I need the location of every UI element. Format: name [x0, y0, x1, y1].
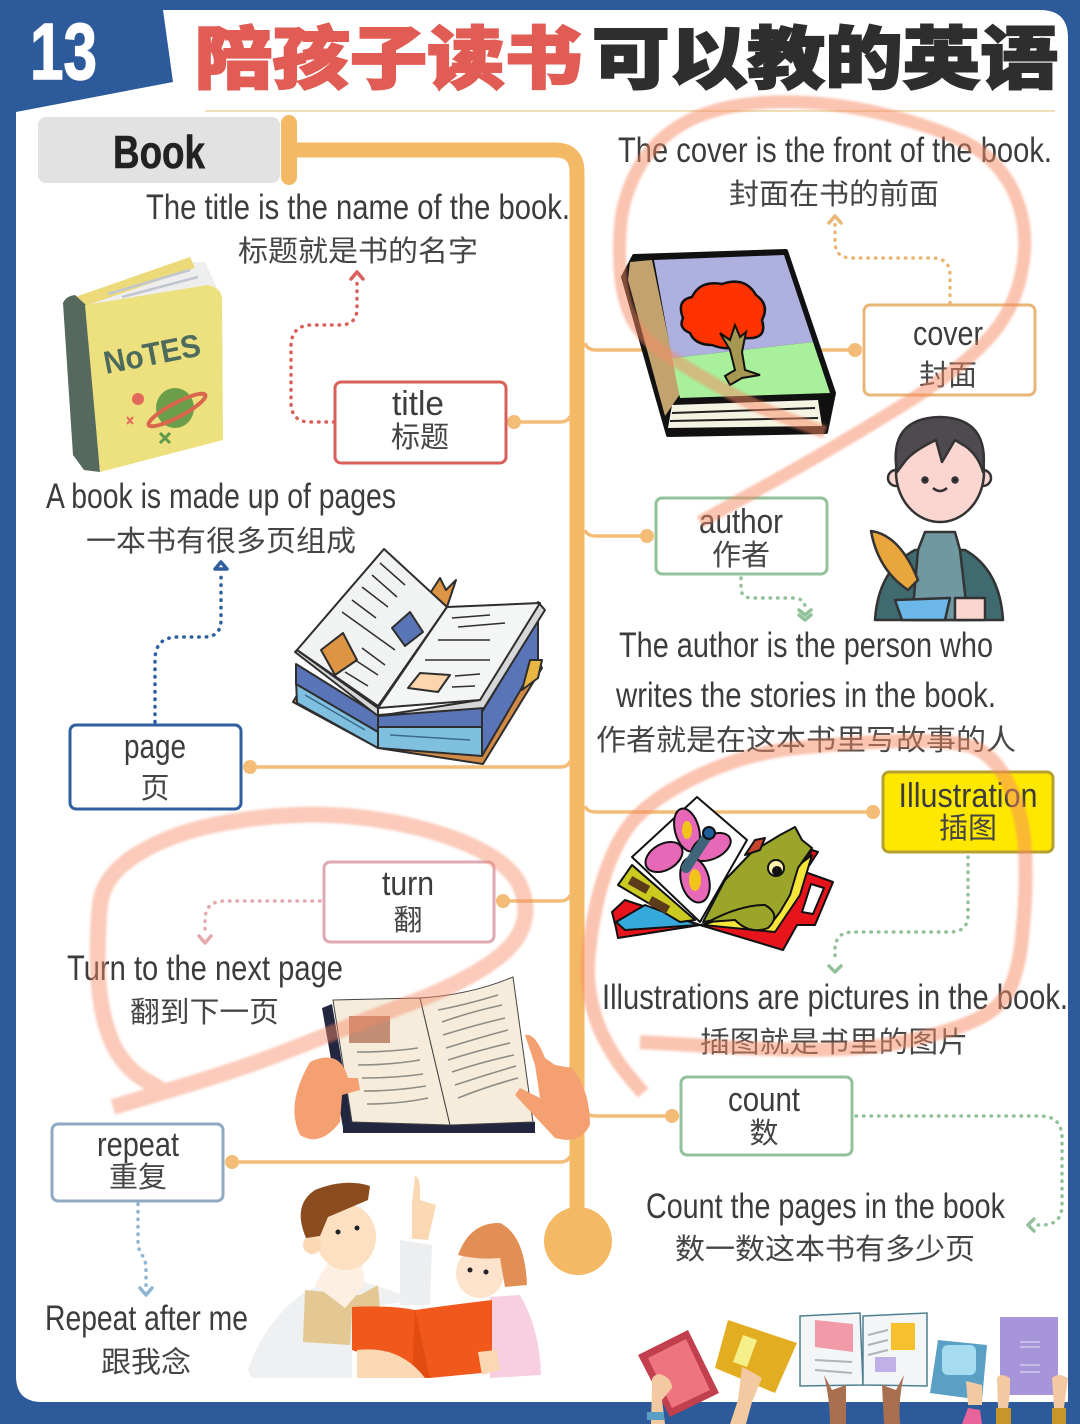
arrow: title to definition — [291, 272, 363, 422]
text: title definition: The title is the name of the book. — [146, 188, 570, 227]
box: repeat — [52, 1124, 223, 1201]
arrow: repeat to definition — [138, 1204, 152, 1295]
text: title definition: 标题就是书的名字 — [238, 235, 478, 268]
branch connectors — [225, 343, 880, 1169]
text: count definition: 数一数这本书有多少页 — [675, 1233, 975, 1266]
box: count: count — [728, 1081, 800, 1119]
box: author — [656, 498, 827, 574]
box: repeat: 重复 — [109, 1161, 167, 1194]
box: illustration — [883, 772, 1053, 852]
text: author definition: The author is the person who — [619, 626, 993, 665]
text: illustration definition — [602, 978, 1068, 1059]
box: illustration: 插图 — [939, 812, 997, 845]
icon: notes book: NoTES — [100, 327, 204, 381]
text: repeat definition: Repeat after me — [45, 1299, 248, 1338]
text: turn definition: Turn to the next page — [67, 949, 343, 988]
text: count definition: Count the pages in the book — [646, 1187, 1005, 1226]
title: 陪孩子读书 — [195, 22, 582, 98]
box: turn: 翻 — [393, 904, 423, 937]
box: cover: 封面 — [919, 359, 977, 392]
text: turn definition: 翻到下一页 — [130, 996, 279, 1029]
title divider — [205, 110, 1055, 112]
text: pages definition: A book is made up of pages — [46, 477, 396, 516]
arrow: page to definition — [155, 562, 227, 722]
title — [195, 22, 1058, 98]
box: illustration: Illustration — [898, 777, 1038, 815]
text: repeat definition — [45, 1299, 248, 1379]
box: cover — [864, 305, 1035, 395]
arrow: cover to definition — [829, 216, 950, 303]
text: author definition: 作者就是在这本书里写故事的人 — [596, 724, 1016, 757]
icon: picture book with butterfly and horse — [612, 797, 833, 950]
arrow: author to definition — [741, 578, 811, 620]
page number: 13 — [30, 7, 97, 96]
text: turn definition — [67, 949, 343, 1029]
box: author: 作者 — [712, 539, 770, 572]
box: cover: cover — [913, 315, 983, 353]
box: page — [70, 725, 241, 809]
text: count definition — [646, 1187, 1005, 1266]
hand-drawn highlight: turn — [98, 815, 526, 1107]
heading: Book — [38, 117, 280, 183]
heading: Book: Book — [113, 126, 205, 178]
arrow: illustration to definition — [829, 857, 968, 972]
arrow: count to definition — [856, 1116, 1062, 1231]
icon: open stacked book — [293, 549, 545, 764]
icon: notes book — [63, 257, 223, 472]
text: title definition — [146, 188, 570, 268]
text: cover definition — [618, 131, 1052, 211]
text: illustration definition: 插图就是书里的图片 — [700, 1026, 968, 1059]
box: count — [681, 1077, 852, 1155]
central timeline spine — [281, 115, 612, 1275]
text: author definition — [596, 626, 1016, 757]
text: pages definition: 一本书有很多页组成 — [86, 525, 356, 558]
icon: author with quill — [871, 417, 1003, 620]
hand-drawn highlight: cover — [620, 102, 1025, 522]
box: page: page — [124, 728, 186, 766]
box: title: title — [392, 385, 444, 423]
box: turn — [324, 862, 494, 942]
icon: father and daughter reading — [248, 1176, 541, 1378]
text: cover definition: 封面在书的前面 — [729, 178, 939, 211]
icon: hands holding books — [638, 1313, 1068, 1424]
icon: hands holding book — [294, 977, 590, 1140]
box: author: author — [699, 503, 783, 541]
box: title: 标题 — [391, 421, 449, 454]
hand-drawn highlight: illustration — [588, 741, 1026, 1093]
icon: book with tree cover — [623, 251, 834, 435]
box: repeat: repeat — [97, 1126, 179, 1164]
text: pages definition — [46, 477, 396, 558]
box: page: 页 — [140, 773, 170, 805]
text: repeat definition: 跟我念 — [101, 1346, 191, 1379]
title: 可以教的英语 — [592, 22, 1058, 98]
box: count: 数 — [749, 1117, 779, 1150]
box: title — [335, 382, 506, 463]
arrow: turn to definition — [199, 901, 320, 943]
text: author definition: writes the stories in the book. — [615, 676, 996, 715]
box: turn: turn — [382, 865, 434, 903]
